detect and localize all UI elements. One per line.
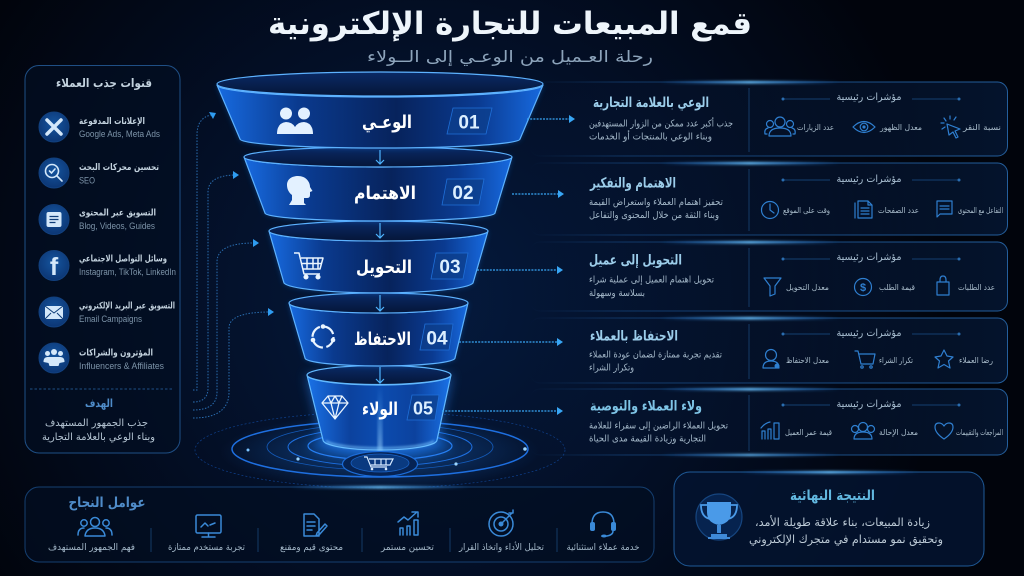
final result text: وتحقيق نمو مستدام في متجرك الإلكتروني (749, 532, 943, 547)
panel 2: interest details (530, 162, 1008, 235)
final result heading: النتيجة النهائية (790, 488, 875, 504)
KPI: impressions: معدل الظهور (879, 123, 922, 132)
KPI: engagement (937, 201, 1003, 217)
panel 5 description: التجارية وزيادة القيمة مدى الحياة (589, 434, 706, 444)
icon: retention cycle (311, 324, 335, 348)
KPI: engagement: التفاعل مع المحتوى (958, 206, 1003, 215)
goal text: الهدف (85, 397, 113, 410)
panel 2 description (589, 197, 723, 221)
funnel base rings (195, 412, 565, 490)
KPI: visits: عدد الزيارات (797, 123, 834, 132)
panel 4 description (589, 350, 722, 374)
panel 3 description (589, 274, 714, 299)
goal text: جذب الجمهور المستهدف (45, 418, 148, 429)
channel: paid ads: Google Ads, Meta Ads (79, 129, 160, 139)
KPI: click rate (941, 116, 1001, 138)
panel 3 KPIs: مؤشرات رئيسية (836, 252, 902, 263)
panel 1 description: وبناء الوعي بالمنتجات أو الخدمات (589, 130, 712, 142)
badge 03 (431, 253, 468, 279)
panel 1 description (589, 116, 733, 142)
KPI: retention rate (763, 350, 829, 368)
stage connector arrows to detail panels (442, 115, 575, 415)
KPI: repeat purchase: تكرار الشراء (879, 356, 913, 365)
KPI: satisfaction: رضا العملاء (959, 356, 993, 365)
panel 4 heading: الاحتفاظ بالعملاء (590, 328, 678, 344)
panel: acquisition channels (25, 66, 180, 453)
goal text (42, 397, 155, 443)
KPI: impressions (853, 122, 922, 132)
channel: paid ads (39, 112, 160, 142)
icon: trophy (696, 494, 742, 540)
panel 3 description: بسلاسة وسهولة (589, 288, 645, 299)
KPI: customer lifetime value (761, 422, 832, 439)
channel: content: التسويق عبر المحتوى (79, 208, 156, 218)
KPI: customer lifetime value: قيمة عمر العميل (785, 428, 832, 437)
KPI: time on site (762, 202, 830, 218)
badge 05 (407, 395, 439, 420)
label: interest: الاهتمام (354, 183, 416, 204)
funnel stage 1: awareness (217, 72, 543, 148)
badge 02 (442, 179, 484, 205)
panel 2 heading: الاهتمام والتفكير (589, 176, 676, 192)
badge 04 (420, 324, 453, 350)
KPI: time on site: وقت على الموقع (783, 206, 830, 215)
channel: social media (39, 250, 176, 281)
funnel stage 2: interest (244, 147, 512, 221)
channel: social media: Instagram, TikTok, LinkedIn (79, 267, 176, 277)
badge 02: 02 (452, 183, 474, 204)
label: awareness: الوعـي (362, 112, 412, 133)
KPI: satisfaction (935, 350, 993, 368)
funnel stage 3: conversion (269, 221, 488, 293)
KPI: pages (855, 201, 919, 218)
KPI: order value: $ (860, 282, 866, 294)
success factors heading: عوامل النجاح (68, 495, 146, 511)
title: قمع المبيعات للتجارة الإلكترونية (268, 6, 752, 42)
panel 4 description: وتكرار الشراء (589, 362, 634, 374)
badge 01 (447, 108, 492, 134)
KPI: order value: قيمة الطلب (879, 283, 915, 292)
icon: people (277, 108, 313, 134)
KPI: retention rate: معدل الاحتفاظ (786, 356, 829, 365)
channel: influencers: Influencers & Affiliates (79, 361, 164, 371)
final result text (749, 515, 943, 547)
panel: success factors (25, 486, 654, 562)
badge 03: 03 (439, 257, 461, 278)
panel 4 description: تقديم تجربة ممتازة لضمان عودة العملاء (589, 350, 722, 360)
factor: valuable content: محتوى قيم ومقنع (280, 543, 343, 553)
panel 2 description: وبناء الثقة من خلال المحتوى والتفاعل (589, 210, 719, 221)
icon: diamond (322, 396, 348, 419)
factor: performance analysis (458, 510, 544, 553)
panel 5 KPIs (761, 399, 1003, 439)
panel 5 description (589, 420, 728, 444)
panel 1: awareness details (530, 81, 1008, 156)
panel 4 KPIs (763, 328, 993, 368)
channel: content (39, 204, 156, 234)
factor: audience understanding: فهم الجمهور المستهدف (48, 543, 135, 553)
factor: user experience: تجربة مستخدم ممتازة (168, 543, 245, 553)
panel 4 KPIs: مؤشرات رئيسية (836, 328, 902, 339)
factor: continuous improvement (380, 512, 434, 553)
factor: customer service: خدمة عملاء استثنائية (566, 543, 640, 553)
channel: email: التسويق عبر البريد الإلكتروني (79, 302, 175, 312)
channel: SEO: SEO (79, 176, 95, 186)
flow arrows from channels to funnel (193, 112, 274, 418)
panel 3 KPIs (764, 252, 995, 296)
final result text: زيادة المبيعات، بناء علاقة طويلة الأمد، (755, 515, 930, 530)
label: retention: الاحتفاظ (354, 329, 411, 350)
channel: email: Email Campaigns (79, 314, 142, 324)
panel 3: conversion details (530, 241, 1008, 311)
funnel down arrows (376, 150, 384, 383)
panel 2 KPIs: مؤشرات رئيسية (836, 174, 902, 185)
funnel stage 4: retention (289, 293, 468, 366)
KPI: referral rate: معدل الإحالة (879, 428, 918, 438)
KPI: reviews (935, 423, 1003, 439)
channel: social media: وسائل التواصل الاجتماعي (79, 254, 167, 264)
funnel base cart button (342, 452, 418, 476)
panel 1 heading: الوعي بالعلامة التجارية (593, 95, 709, 111)
panel 3 description: تحويل اهتمام العميل إلى عملية شراء (589, 274, 714, 286)
subtitle: رحلة العـميل من الوعـي إلى الــولاء (367, 47, 653, 67)
badge 01: 01 (458, 112, 480, 134)
channel: email (39, 297, 175, 327)
KPI: click rate: نسبة النقر (962, 123, 1001, 132)
panel 4: retention details (530, 317, 1008, 383)
KPI: repeat purchase (855, 351, 913, 368)
factor: audience understanding (48, 518, 135, 553)
badge 04: 04 (426, 328, 448, 350)
panel 2 KPIs (762, 174, 1003, 218)
KPI: conversion rate (764, 278, 829, 296)
panel 5: loyalty details (530, 388, 1008, 456)
channel: social media: f (50, 253, 59, 281)
KPI: order value (854, 278, 915, 296)
KPI: referral rate (852, 422, 918, 439)
channel: influencers (39, 343, 164, 373)
panel 5 description: تحويل العملاء الراضين إلى سفراء للعلامة (589, 420, 728, 432)
label: conversion: التحويل (356, 257, 412, 278)
channel: paid ads: الإعلانات المدفوعة (79, 117, 145, 127)
channels heading: قنوات جذب العملاء (56, 76, 152, 91)
panel 1 KPIs: مؤشرات رئيسية (836, 92, 902, 103)
panel 1 KPIs (765, 92, 1001, 138)
icon: head (287, 176, 312, 205)
goal text: وبناء الوعي بالعلامة التجارية (42, 432, 155, 443)
KPI: orders (937, 276, 995, 295)
KPI: pages: عدد الصفحات (878, 206, 919, 215)
factor: valuable content (280, 514, 343, 553)
funnel stage 5: loyalty (307, 366, 451, 451)
icon: shopping cart (294, 253, 323, 279)
label: loyalty: الولاء (362, 399, 398, 420)
channel: SEO (39, 158, 159, 188)
factor: continuous improvement: تحسين مستمر (380, 543, 434, 553)
badge 05: 05 (413, 398, 433, 418)
panel 3 heading: التحويل إلى عميل (589, 252, 682, 268)
factor: user experience (168, 515, 245, 553)
channel: SEO: تحسين محركات البحث (79, 163, 159, 173)
KPI: conversion rate: معدل التحويل (786, 283, 829, 292)
panel 1 description: جذب أكبر عدد ممكن من الزوار المستهدفين (589, 116, 733, 130)
factor: customer service (566, 512, 640, 553)
panel: final result (674, 471, 984, 566)
KPI: visits (765, 117, 834, 136)
panel 2 description: تحفيز اهتمام العملاء واستعراض القيمة (589, 197, 723, 208)
KPI: orders: عدد الطلبات (958, 283, 995, 292)
factor: performance analysis: تحليل الأداء واتخاذ القرار (458, 541, 544, 553)
panel 5 KPIs: مؤشرات رئيسية (836, 399, 902, 410)
channel: influencers: المؤثرون والشراكات (79, 348, 153, 358)
channel: content: Blog, Videos, Guides (79, 221, 155, 231)
panel 5 heading: ولاء العملاء والتوصية (590, 398, 702, 414)
